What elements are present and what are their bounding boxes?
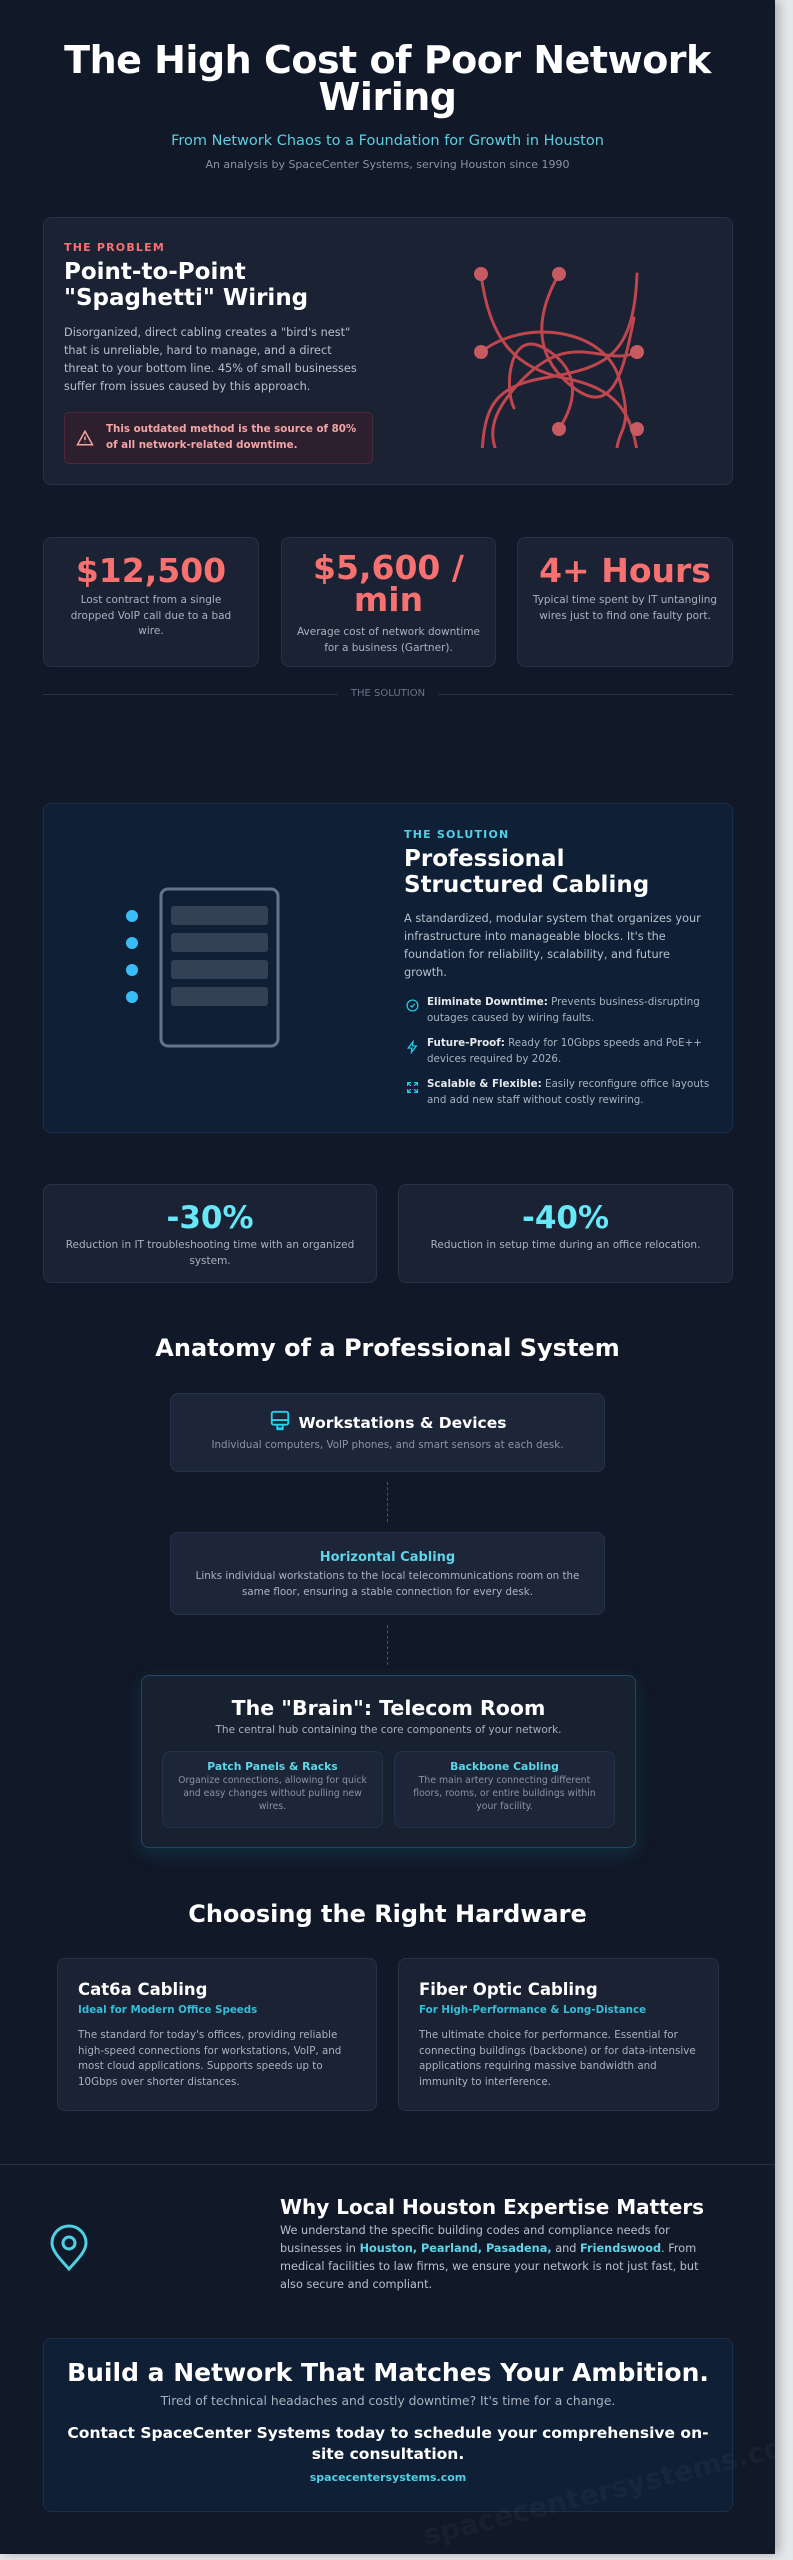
box: workstations: Individual computers, VoIP phones, and smart sensors at each desk.: [211, 1439, 564, 1451]
icon: monitor: [270, 1410, 290, 1430]
sub-box: backbone cabling: The main artery connecting different floors, rooms, or entire buildings within your facility.: [413, 1775, 596, 1812]
card: cat6a: The standard for today's offices, providing reliable high-speed connections for workstations, VoIP, and most cloud applications. Supports speeds up to 10Gbps over shorter distances.: [78, 2029, 341, 2088]
box: telecom room: The "Brain": Telecom Room: [232, 1696, 545, 1720]
houston expertise text: We understand the specific building codes and compliance needs for businesses in Houston, Pearland, Pasadena, and Friendswood. From medical facilities to law firms, we ensure your network is not just fast, but also secure and compliant.: [280, 2224, 699, 2291]
warning callout: [64, 412, 373, 464]
panel: call to action: Contact SpaceCenter Systems today to schedule your comprehensive on-site consultation.: [67, 2424, 709, 2463]
card: fiber optic: For High-Performance & Long-Distance: [419, 2004, 646, 2016]
houston expertise text: [280, 2195, 704, 2291]
stat: $12,500: $12,500: [76, 551, 226, 590]
solution heading: Professional: [404, 846, 564, 872]
stat: 4+ hours: [517, 537, 733, 667]
problem heading: Point-to-Point: [64, 259, 246, 285]
box: telecom room: [141, 1675, 636, 1848]
feature: scalable: Scalable & Flexible: Easily reconfigure office layouts and add new staff without costly rewiring.: [427, 1078, 709, 1106]
sub-box: patch panels: Patch Panels & Racks: [207, 1760, 338, 1773]
problem body text: Disorganized, direct cabling creates a "bird's nest" that is unreliable, hard to manage, and a direct threat to your bottom line. 45% of small businesses suffer from issues caused by this approach.: [64, 326, 357, 393]
stat: $5,600/min: $5,600 /: [313, 548, 464, 587]
box: horizontal cabling: Horizontal Cabling: [320, 1550, 455, 1565]
card: cat6a: Ideal for Modern Office Speeds: [78, 2004, 257, 2016]
section separator: [0, 2164, 775, 2165]
solution label: THE SOLUTION: [404, 828, 509, 841]
sub-box: backbone cabling: [394, 1751, 615, 1828]
card: fiber optic: [398, 1958, 719, 2111]
icon: spaghetti wiring: [474, 267, 644, 448]
stat: -40%: Reduction in setup time during an office relocation.: [431, 1239, 700, 1251]
box: horizontal cabling: [170, 1532, 605, 1615]
title: Wiring: [319, 75, 456, 119]
box: telecom room: The central hub containing the core components of your network.: [216, 1724, 561, 1736]
sub-box: backbone cabling: Backbone Cabling: [450, 1760, 559, 1773]
divider: the solution: THE SOLUTION: [351, 688, 425, 699]
panel: the problem: [43, 217, 733, 485]
icon: structured rack: [126, 888, 280, 1048]
problem label: THE PROBLEM: [64, 241, 165, 254]
panel: call to action: [43, 2338, 733, 2512]
feature: eliminate downtime: Eliminate Downtime: Prevents business-disrupting outages caused by wiring faults.: [427, 996, 700, 1024]
panel: call to action: Tired of technical headaches and costly downtime? It's time for a change.: [161, 2394, 615, 2408]
problem heading: [64, 259, 308, 311]
box: workstations: Workstations & Devices: [299, 1414, 506, 1432]
solution body: A standardized, modular system that organizes your infrastructure into manageable blocks. It's the foundation for reliability, scalability, and future growth.: [404, 912, 701, 979]
heading: choosing hardware: Choosing the Right Hardware: [188, 1900, 587, 1928]
card: fiber optic: Fiber Optic Cabling: [419, 1980, 598, 1999]
solution heading: [404, 846, 649, 898]
panel: call to action: spacecentersystems.com: [310, 2471, 466, 2484]
sub-box: patch panels: [162, 1751, 383, 1828]
stat: -30%: [43, 1184, 377, 1283]
warning text: This outdated method is the source of 80% of all network-related downtime.: [106, 423, 356, 450]
heading: anatomy: Anatomy of a Professional System: [155, 1334, 620, 1362]
title: The High Cost of Poor Network: [64, 38, 711, 82]
stat: $5,600/min: Average cost of network downtime for a business (Gartner).: [297, 626, 480, 654]
card: fiber optic: The ultimate choice for performance. Essential for connecting buildings (backbone) or for data-intensive applications requiring massive bandwidth and immunity to interference.: [419, 2029, 696, 2088]
stat: $5,600/min: [281, 537, 496, 667]
panel: the solution: [43, 803, 733, 1133]
stat: $12,500: [43, 537, 259, 667]
solution heading: Structured Cabling: [404, 872, 649, 898]
stat: $5,600/min: min: [354, 580, 423, 619]
card: cat6a: Cat6a Cabling: [78, 1980, 207, 1999]
connector line: [387, 1625, 388, 1665]
box: horizontal cabling: Links individual workstations to the local telecommunications room on the same floor, ensuring a stable connection for every desk.: [196, 1570, 579, 1598]
title: [64, 38, 712, 119]
stat: -30%: -30%: [166, 1200, 254, 1236]
box: workstations: [170, 1393, 605, 1472]
stat: -40%: [398, 1184, 733, 1283]
connector line: [387, 1482, 388, 1522]
sub-box: patch panels: Organize connections, allowing for quick and easy changes without pulling new wires.: [178, 1775, 367, 1812]
stat: -30%: Reduction in IT troubleshooting time with an organized system.: [66, 1239, 354, 1267]
stat: $12,500: Lost contract from a single dropped VoIP call due to a bad wire.: [71, 594, 231, 637]
panel: call to action: Build a Network That Matches Your Ambition.: [67, 2358, 709, 2387]
feature list: [406, 996, 709, 1106]
subtitle: From Network Chaos to a Foundation for Growth in Houston: [171, 133, 604, 149]
byline: An analysis by SpaceCenter Systems, serving Houston since 1990: [205, 158, 570, 171]
problem heading: "Spaghetti" Wiring: [64, 285, 308, 311]
icon: warning: [76, 430, 94, 446]
card: cat6a: [57, 1958, 377, 2111]
stat: -40%: -40%: [522, 1200, 609, 1236]
houston expertise text: Why Local Houston Expertise Matters: [280, 2195, 704, 2219]
icon: location pin: [50, 2224, 88, 2272]
stat: 4+ hours: Typical time spent by IT untangling wires just to find one faulty port.: [533, 594, 717, 622]
stat: 4+ hours: 4+ Hours: [539, 551, 711, 590]
feature: future-proof: Future-Proof: Ready for 10Gbps speeds and PoE++ devices required by 2026.: [427, 1037, 702, 1065]
